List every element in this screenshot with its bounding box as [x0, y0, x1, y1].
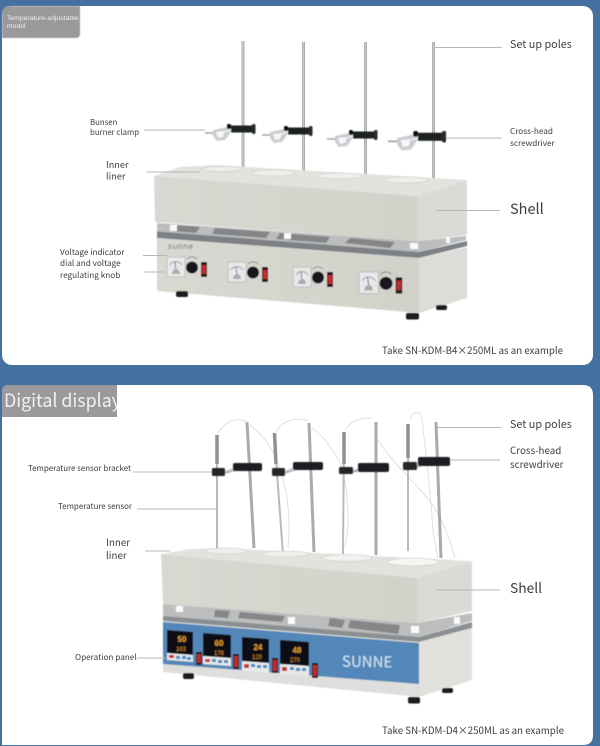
label: Bunsen burner clamp: burner clamp — [90, 127, 139, 138]
temperature controller 3 — [242, 637, 278, 673]
shell top — [154, 165, 467, 196]
panel: temperature-adjustable model — [2, 6, 593, 365]
tag: temperature-adjustable model — [2, 6, 80, 38]
temperature controller 4: 48 — [293, 646, 302, 655]
temperature controller 1 — [167, 630, 202, 665]
label: Voltage indicator dial and voltage regulating knob: regulating knob — [60, 269, 120, 281]
label: Inner liner: Inner — [106, 535, 130, 549]
steel plate — [163, 616, 472, 642]
label: Cross-head screwdriver: Cross-head — [510, 443, 561, 457]
label: Cross-head screwdriver: screwdriver — [510, 457, 564, 471]
brand: sunne: sunne — [168, 242, 194, 251]
base right side — [419, 247, 467, 313]
label: Cross-head screwdriver: screwdriver — [510, 137, 555, 149]
device: voltage model — [154, 165, 467, 320]
label: Bunsen burner clamp: Bunsen — [90, 117, 118, 128]
tag: temperature-adjustable model: Temperature-adjustable — [7, 15, 79, 22]
panel: digital display model — [2, 385, 593, 745]
heating plate gap — [157, 223, 466, 252]
voltage controls — [167, 257, 402, 294]
label: Operation panel: Operation panel — [75, 651, 137, 663]
temperature controller 2: 60 — [215, 639, 224, 648]
label: Set up poles: Set up poles — [510, 36, 572, 52]
sensors and poles — [217, 422, 441, 558]
panel background — [2, 6, 593, 365]
sensor brackets — [212, 457, 450, 476]
panel background — [2, 385, 593, 745]
callout lines — [143, 48, 502, 272]
temperature controller 4: 270 — [290, 658, 301, 664]
callout lines — [133, 428, 502, 658]
label: Inner liner: liner — [106, 168, 126, 182]
label: Shell: Shell — [510, 577, 542, 597]
device: digital model — [161, 548, 472, 704]
shell front — [154, 176, 417, 241]
brand: SUNNE: SUNNE — [342, 651, 392, 672]
label: Voltage indicator dial and voltage regulating knob: Voltage indicator — [60, 246, 125, 258]
tag: digital display: Digital display — [4, 387, 121, 413]
label: Set up poles: Set up poles — [510, 416, 572, 432]
temperature controller 1: 50 — [178, 635, 187, 644]
blue control panel — [163, 622, 419, 684]
shell right side — [417, 180, 467, 241]
temperature controller 3: 120 — [252, 655, 263, 661]
shell front — [161, 554, 417, 623]
shell right side — [417, 561, 472, 623]
temperature controller 1: 163 — [176, 647, 187, 653]
label: Voltage indicator dial and voltage regulating knob: dial and voltage — [60, 257, 121, 269]
feet — [183, 673, 194, 679]
label: Inner liner: liner — [106, 548, 127, 562]
caption: model D4: Take SN-KDM-D4×250ML as an example — [382, 722, 564, 737]
steel plate — [157, 232, 467, 258]
label: Temperature sensor: Temperature sensor — [58, 501, 133, 512]
temperature controller 2: 176 — [214, 651, 225, 657]
base front — [163, 621, 419, 697]
heating plate gap — [163, 604, 472, 637]
feet — [176, 291, 188, 297]
caption: model B4: Take SN-KDM-B4×250ML as an example — [382, 342, 563, 357]
temperature controller 4 — [280, 640, 318, 678]
support poles — [242, 41, 435, 186]
tag: temperature-adjustable model: model — [7, 23, 26, 30]
Bunsen burner clamps — [205, 124, 446, 151]
shell top — [161, 548, 472, 578]
temperature controller 3: 24 — [254, 643, 263, 652]
label: Shell: Shell — [510, 198, 544, 219]
base right side — [419, 628, 472, 697]
label: Cross-head screwdriver: Cross-head — [510, 125, 553, 137]
label: Inner liner: Inner — [106, 157, 129, 171]
cables — [218, 412, 455, 558]
temperature controller 2 — [203, 633, 239, 669]
base front — [157, 238, 419, 313]
label: Temperature sensor bracket: Temperature sensor bracket — [28, 463, 131, 474]
